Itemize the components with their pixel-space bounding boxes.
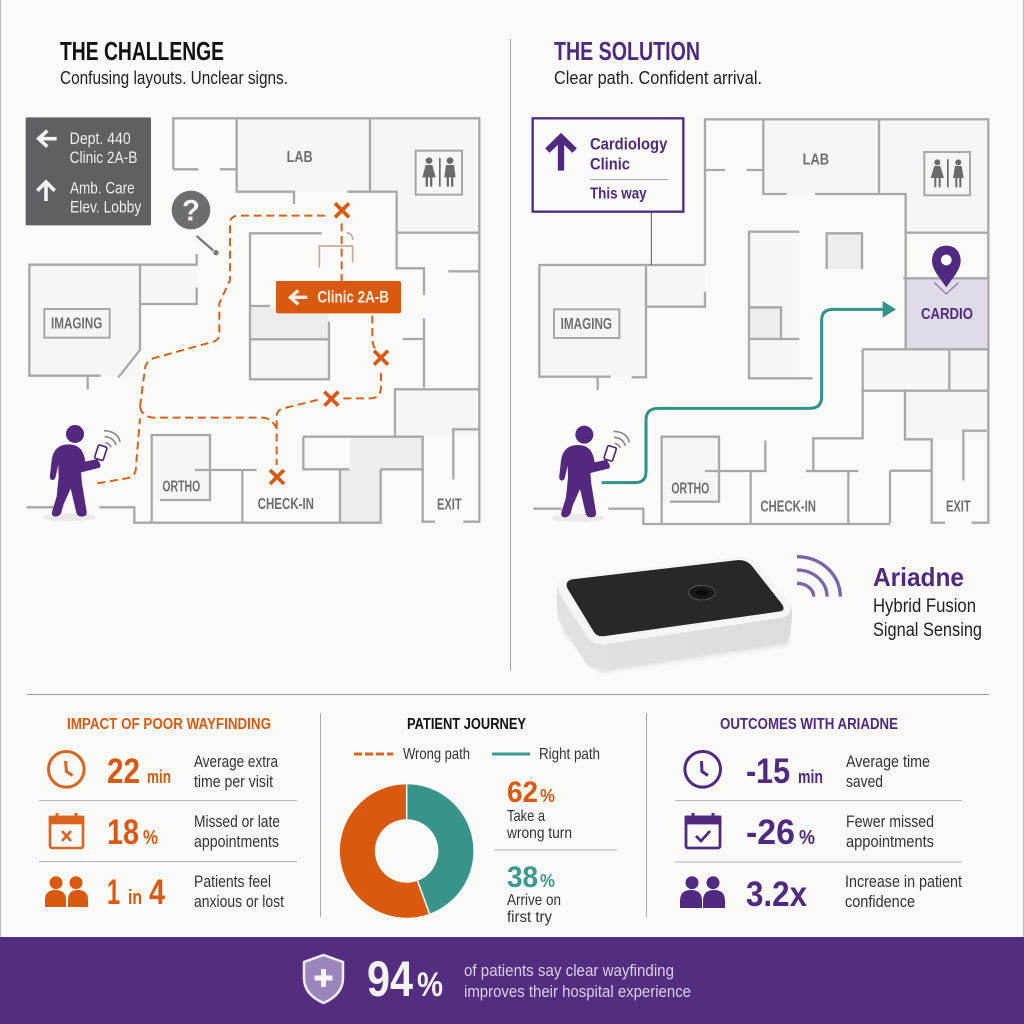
stat: 22 min: [107, 752, 171, 791]
patient figure with phone: [552, 426, 629, 522]
sign: clinic 2A-B orange: [276, 281, 401, 313]
donut chart: [339, 784, 474, 919]
stat: minus 26 percent: %: [799, 827, 815, 849]
stat: 62 percent: %: [540, 786, 555, 806]
wrong-turn marker: [374, 351, 388, 365]
heading: the challenge: Confusing layouts. Unclear signs.: [60, 68, 288, 88]
sign: cardiology clinic: [533, 118, 683, 265]
heading: the solution: THE SOLUTION: [554, 36, 700, 66]
right path with arrow: [602, 301, 896, 483]
text: increase in confidence: [845, 872, 962, 911]
icon: question bubble: ?: [182, 195, 200, 228]
icon: signal waves: [797, 557, 840, 597]
panel: patient journey: [339, 716, 617, 926]
stat: 22 min: min: [147, 767, 171, 787]
icon: restrooms: [924, 152, 970, 195]
text: banner caption: [464, 961, 691, 1001]
stat: 18 percent: %: [143, 827, 158, 849]
heading: PATIENT JOURNEY: [407, 716, 526, 733]
stat: 1 in 4: 1: [107, 873, 120, 912]
stat: minus 15 min: [746, 752, 823, 791]
stat: 38 percent: [507, 861, 561, 926]
wrong path: [97, 216, 381, 483]
room label: IMAGING: IMAGING: [51, 316, 102, 333]
stat: 1 in 4: 4: [149, 873, 165, 912]
stat: 3.2x: 3.2x: [746, 875, 807, 914]
room label: IMAGING: IMAGING: [561, 316, 612, 333]
sign: confusing directory: [26, 117, 151, 225]
room label: CARDIO: CARDIO: [921, 306, 973, 323]
legend: [354, 746, 600, 763]
stat: 38 percent: 38: [507, 861, 538, 894]
icon: question bubble: [172, 191, 219, 255]
room label: EXIT: EXIT: [437, 497, 462, 514]
heading: the solution: [554, 36, 762, 88]
text: patients feel: Patients feel: [194, 872, 271, 891]
stat: 62 percent: wrong turn: [506, 825, 572, 842]
sign: cardiology clinic: This way: [590, 185, 647, 202]
text: missed or late: [194, 812, 280, 851]
stat: 22 min: 22: [107, 752, 140, 791]
icon: calendar check: [686, 813, 720, 848]
icon: restrooms: [416, 151, 462, 195]
legend: Right path: [539, 746, 600, 763]
sign: confusing directory: Clinic 2A-B: [70, 149, 137, 167]
stat: minus 15 min: -15: [746, 752, 790, 791]
room label: ORTHO: ORTHO: [671, 480, 709, 497]
stat: 94 percent: 94: [367, 951, 413, 1007]
room label: CHECK-IN: CHECK-IN: [760, 499, 816, 516]
legend: Wrong path: [403, 746, 470, 763]
icon: calendar missed: [50, 813, 83, 848]
sign: confusing directory: Dept. 440: [70, 130, 131, 148]
patient figure with phone: [42, 425, 120, 521]
banner: 94 percent: [0, 937, 1024, 1024]
text: Ariadne product: Signal Sensing: [873, 620, 982, 641]
wrong-turn marker: [335, 203, 349, 217]
stat: 1 in 4: [107, 873, 165, 912]
text: banner caption: improves their hospital experience: [464, 982, 691, 1001]
heading: OUTCOMES WITH ARIADNE: [720, 716, 898, 733]
text: average extra: time per visit: [194, 772, 273, 791]
icon: shield: [304, 955, 343, 1003]
text: fewer missed: appointments: [846, 832, 934, 851]
icon: location pin: [932, 246, 961, 294]
heading: the challenge: THE CHALLENGE: [60, 36, 224, 66]
text: patients feel: anxious or lost: [194, 892, 284, 911]
sign: confusing directory: Elev. Lobby: [70, 198, 142, 216]
panel: challenge floor plan: [26, 117, 479, 523]
stat: minus 26 percent: -26: [746, 813, 795, 852]
stat: 62 percent: 62: [507, 776, 538, 809]
text: average extra: [194, 752, 278, 791]
stat: 94 percent: %: [417, 966, 443, 1004]
panel: outcomes with Ariadne: [675, 716, 962, 914]
text: fewer missed: [846, 812, 934, 851]
room label: IMAGING: [554, 309, 619, 338]
text: missed or late: appointments: [194, 832, 279, 851]
sign: cardiology clinic: Clinic: [590, 154, 630, 173]
room label: CHECK-IN: CHECK-IN: [258, 496, 314, 513]
text: average time: [846, 752, 930, 791]
heading: IMPACT OF POOR WAYFINDING: [67, 716, 271, 733]
room label: LAB: LAB: [287, 149, 313, 166]
stat: 18 percent: 18: [107, 813, 139, 852]
text: increase in confidence: confidence: [845, 892, 915, 911]
text: Ariadne product: Ariadne: [873, 562, 964, 592]
text: missed or late: Missed or late: [194, 812, 280, 831]
stat: 38 percent: %: [540, 871, 555, 891]
sign: cardiology clinic: Cardiology: [590, 134, 668, 153]
text: Ariadne product: [873, 562, 982, 641]
wrong-turn marker: [324, 392, 338, 406]
stat: 38 percent: Arrive on: [507, 892, 561, 909]
room label: LAB: LAB: [803, 151, 829, 168]
icon: clock: [685, 752, 720, 787]
text: average time: saved: [846, 772, 883, 791]
text: banner caption: of patients say clear wayfinding: [464, 961, 674, 980]
stat: 62 percent: Take a: [507, 808, 545, 825]
device: Ariadne sensor: [557, 557, 792, 672]
text: increase in confidence: Increase in patient: [845, 872, 962, 891]
heading: the challenge: [60, 36, 288, 88]
text: fewer missed: Fewer missed: [846, 812, 934, 831]
stat: 38 percent: first try: [507, 909, 552, 926]
sign: clinic 2A-B orange: Clinic 2A-B: [317, 288, 389, 307]
heading: the solution: Clear path. Confident arrival.: [554, 68, 762, 88]
stat: minus 15 min: min: [798, 767, 823, 787]
room label: IMAGING: [44, 309, 110, 338]
icon: clock: [49, 752, 84, 787]
stat: 1 in 4: in: [128, 887, 142, 909]
panel: impact of poor wayfinding: [39, 716, 297, 912]
text: average extra: Average extra: [194, 752, 278, 771]
room label: ORTHO: ORTHO: [162, 479, 200, 496]
sign: confusing directory: Amb. Care: [70, 180, 135, 198]
panel: solution floor plan: [533, 118, 988, 524]
room label: EXIT: EXIT: [946, 499, 971, 516]
stat: 62 percent: [506, 776, 572, 842]
text: average time: Average time: [846, 752, 930, 771]
text: patients feel: [194, 872, 284, 911]
wrong-turn marker: [270, 470, 284, 484]
icon: people: [680, 876, 725, 908]
icon: people: [45, 876, 88, 907]
text: Ariadne product: Hybrid Fusion: [873, 596, 976, 617]
